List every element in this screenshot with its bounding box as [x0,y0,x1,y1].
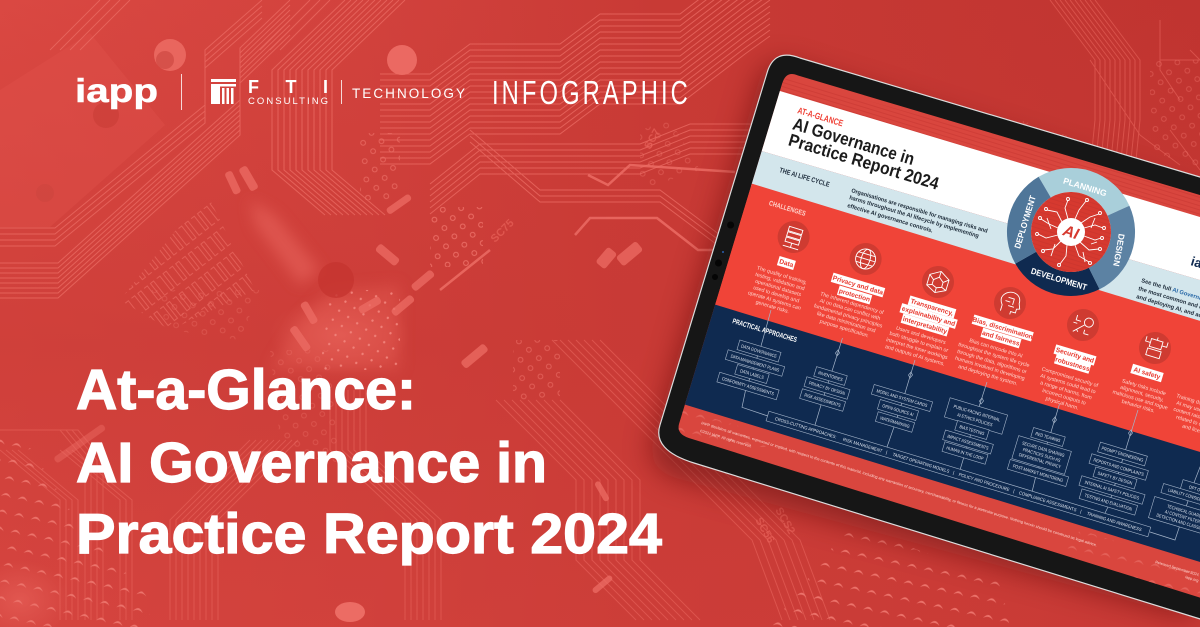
approaches column 4: PUBLIC-FACING INTERNAL [953,403,1001,423]
description: interpret the inner workings [885,337,949,361]
icon: key circuit [1063,305,1103,345]
intro text: Organisations are responsible for managing risks and [850,188,989,235]
label [831,273,885,304]
segment: planning [1039,168,1129,216]
description: malicious use and rogue [1112,389,1168,412]
challenge: security [1033,305,1103,415]
cross-cutting approaches bar: RISK MANAGEMENT [842,437,883,454]
navy practical approaches band [670,300,1200,565]
description: testing, validation and [754,272,805,292]
logo: FTI Consulting wordmark: CONSULTING [248,96,328,107]
tablet camera and buttons [712,222,734,280]
approaches column 1: DATA LABELS [739,368,765,380]
logo: Technology: TECHNOLOGY [352,86,465,101]
approaches column 2: PRIVACY BY DESIGN [808,380,846,396]
cross-cutting approaches bar [766,411,1151,537]
description: generate risks. [755,300,790,315]
label: explainability and [901,305,956,328]
segment: deployment [1007,177,1051,264]
description: humans involved in developing [954,356,1025,382]
description: operational datasets [754,279,802,298]
cross-cutting approaches bar: | [885,450,888,455]
approaches column 5: POST-MARKET MONITORING [1012,463,1064,483]
wheel centre [1031,192,1111,272]
label: Transparency, [910,298,954,318]
description: alignment, security, [1119,385,1164,403]
tablet screen [670,60,1200,620]
label [899,296,958,336]
approaches column 4: HUMAN IN THE LOOP [946,445,984,461]
report title: Practice Report 2024 [786,130,942,194]
life cycle label: THE AI LIFE CYCLE [778,167,830,189]
intro text: effective AI governance controls. [846,203,934,235]
divider [181,74,182,110]
approaches column 4: AI ETHICS POLICIES [957,412,993,428]
approaches column 6 [1079,442,1148,515]
approaches column 1: DATA GOVERNANCE [740,343,778,359]
approaches column 5: PRACTICES SUCH AS [1022,447,1061,463]
report kicker: AT-A-GLANCE [796,105,844,128]
icon: cube [918,262,958,302]
tablet shadow [651,63,1192,618]
AI circuit icon [1036,198,1106,266]
description: and outputs of AI systems. [884,344,945,368]
challenges label: CHALLENGES [768,200,807,218]
report title: AI Governance in [790,114,917,169]
description: The quality of training, [756,265,808,286]
approaches column 3 [871,384,933,432]
approaches column 2 [800,367,850,411]
cross-cutting approaches bar: | [1080,509,1082,514]
board marking: SC75: SC75 [489,217,517,245]
approaches column 3: MODEL AND SYSTEM CARDS [876,388,928,408]
cross-cutting approaches bar: TARGET OPERATING MODELS [892,452,950,474]
light blue life cycle band [750,148,1200,324]
description: and deploying the system. [957,364,1018,387]
AI life cycle wheel [1007,168,1135,296]
footer disclaimer: IAPP disclaims all warranties, expressed or implied, with respect to the contents of this material, including any warranties of accuracy, merchantability, or fitness for a particular purpose. Nothing herein should be construed as legal advice. [701,421,1097,547]
description: incorrect outputs to [1041,388,1086,407]
tablet body [659,55,1200,622]
label: Security and [1055,347,1095,365]
description: AI on data can conflict with [819,298,881,322]
description: Compromised security of [1041,366,1099,389]
screen base and top strip [670,60,1200,620]
logo: FTI column icon [211,79,236,104]
logo: FTI Consulting wordmark [248,77,328,107]
main title: Practice Report 2024 [76,502,662,566]
icon: robot [1135,328,1175,368]
icon: globe [850,243,882,275]
challenge: transparency [883,262,958,368]
description: AI systems could lead to [1039,373,1096,395]
description: a range of harms, from [1039,380,1093,402]
description: through the data, algorithms or [956,349,1027,375]
approaches column 3: WATERMARKING [880,415,910,429]
approaches column 4: IMPACT ASSESSMENTS [947,433,989,451]
description: Bias can encode into AI [968,338,1023,360]
description: fundamental privacy principles [813,303,883,330]
label: deployment: DEPLOYMENT [1012,194,1038,250]
approaches column 2: RISK ASSESSMENTS [804,392,842,408]
approaches column 5 [1007,427,1071,487]
logo: iapp: iapp [75,72,158,109]
main title: At-a-Glance: [76,358,416,422]
approaches column 1 [717,340,785,400]
challenge: bias [951,283,1034,389]
challenge: data [748,221,810,314]
cross-cutting approaches bar: TRAINING AND AWARENESS [1086,511,1142,532]
tablet [659,55,1200,622]
approaches column 3: OPEN-SOURCE AI [882,403,914,417]
heading: Infographic: INFOGRAPHIC [492,75,688,112]
description: throughout the system life cycle [957,342,1030,369]
practical approaches label: PRACTICAL APPROACHES [731,316,798,344]
icon: head [990,283,1030,323]
footer disclaimer: ©2024 IAPP. All rights reserved. [699,429,752,448]
approaches column 5: SECURE DATA SHARING [1021,440,1065,458]
label: interpretability [902,316,948,336]
description: Safety risks include [1121,378,1167,397]
red challenges band [700,180,1200,455]
description: both struggle to explain or [889,331,949,354]
header logos [75,72,688,112]
label: robustness [1054,356,1091,373]
approaches column 5: DIFFERENTIAL PRIVACY [1018,452,1062,470]
description: purpose specification. [819,319,870,339]
board marking: SCS2: SCS2 [772,506,797,536]
approaches column 1: DATA MANAGEMENT PLANS [730,353,780,373]
approaches column 6: SAFETY BY DESIGN [1097,470,1133,486]
description: used to develop and [752,285,800,304]
board marking: SC7: SC7 [642,127,663,152]
approaches column 7 [1148,480,1200,539]
description: operate AI systems can [747,290,801,312]
challenge: AI safety [1110,328,1175,418]
approaches column 4: BIAS TESTING [959,424,985,436]
description: physical harm. [1045,396,1079,412]
approaches column 2: INVENTORIES [818,370,844,382]
segment: development [1015,252,1100,296]
approaches column 6: TESTING AND EVALUATION [1084,492,1133,512]
description: like data minimization and [816,311,876,334]
AI badge: AI [1060,222,1081,243]
approaches column 1: CONFORMITY ASSESSMENTS [721,376,775,397]
main title: AI Governance in [76,431,547,495]
description: Users and developers [895,325,947,346]
label: protection [838,288,871,304]
connector lines [742,310,1200,540]
footer disclaimer [699,421,1200,583]
main title [76,358,662,566]
label: Bias, discrimination [971,316,1033,341]
cross-cutting approaches bar: | [952,470,955,475]
intro text: harms throughout the AI lifecycle by implementing [848,195,980,240]
label: Data [778,258,794,269]
approaches column 6: INTERNAL AI SAFETY POLICIES [1084,479,1140,501]
footer disclaimer: Released September 2024. [1155,560,1200,577]
segment: design [1089,206,1135,289]
label: Privacy and data [832,275,884,297]
divider [341,80,342,104]
white header band [750,82,1200,283]
label: AI safety [1133,366,1161,381]
footer disclaimer: iapp.org [1185,575,1199,583]
label [1054,344,1096,374]
board marking: SC56: SC56 [752,516,777,545]
cross-cutting approaches bar: COMPLIANCE ASSESSMENTS [1018,490,1077,512]
challenge: privacy [814,243,886,338]
logo: FTI Consulting wordmark: F T I [248,77,328,97]
label: and fairness [981,330,1021,348]
cross-cutting approaches bar: POLICY AND PROCEDURE [958,472,1010,492]
approaches column 4 [942,398,1008,464]
description: The inherent dependency of [819,291,885,316]
label: design: DESIGN [1111,233,1127,267]
cross-cutting approaches bar: CROSS-CUTTING APPROACHES: [774,416,837,440]
approaches column 5: RED TEAMING [1035,431,1061,443]
label: planning: PLANNING [1062,176,1108,198]
approaches column 6: REPORTS AND COMPLAINTS [1093,457,1145,477]
cross-cutting approaches bar: | [1013,489,1015,494]
label: development: DEVELOPMENT [1030,266,1089,292]
approaches column 6: PROMPT ENGINEERING [1101,445,1144,463]
icon: server [778,221,810,253]
description: behavior risks. [1121,399,1155,415]
